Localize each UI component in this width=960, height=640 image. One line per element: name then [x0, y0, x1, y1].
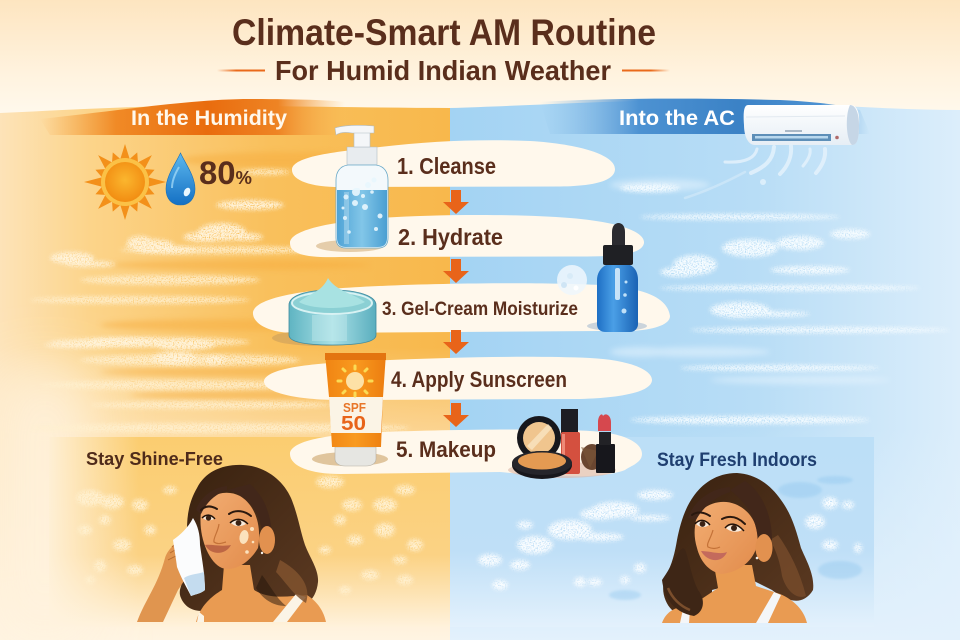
- panel: AC side background: [450, 100, 960, 640]
- icon: sunscreen tube: [312, 353, 388, 466]
- arrow 4: [443, 403, 469, 427]
- banner: into the AC: Into the AC: [619, 107, 735, 130]
- icon: sunscreen tube: 50: [341, 413, 366, 435]
- subtitle: For Humid Indian Weather: [275, 55, 611, 86]
- humidity value: 80%: [199, 155, 252, 191]
- step 3 pill: 3. Gel-Cream Moisturize: [382, 298, 578, 320]
- icon: gel cream jar: [272, 278, 376, 346]
- clouds: humidity side: [44, 200, 284, 364]
- step 2 pill: 2. Hydrate: [398, 224, 503, 250]
- icon: serum dropper bottle: [557, 223, 647, 332]
- woman dabbing face with tissue: [137, 465, 326, 622]
- step 4 pill: [264, 357, 652, 400]
- banner: in the humidity: In the Humidity: [131, 107, 287, 130]
- sky background: [0, 0, 960, 125]
- woman smiling indoors: [662, 473, 813, 623]
- step 3 pill: [253, 283, 670, 333]
- banner: in the humidity: [40, 99, 345, 135]
- panel: stay shine-free scene: [49, 437, 450, 627]
- step 2 pill: [290, 215, 644, 257]
- step 5 pill: 5. Makeup: [396, 437, 496, 462]
- step 5 pill: [290, 430, 642, 476]
- heading: stay fresh indoors: Stay Fresh Indoors: [657, 450, 817, 471]
- panel: humidity side background: [0, 106, 450, 640]
- icon: pump bottle: [316, 125, 388, 252]
- arrow 1: [443, 190, 469, 214]
- icon: makeup set: [508, 409, 616, 479]
- banner: into the AC: [540, 99, 870, 134]
- arrow 3: [443, 330, 469, 354]
- icon: sunscreen tube: SPF: [343, 401, 366, 415]
- icon: water drop: [166, 153, 195, 205]
- icon: sun: [84, 144, 166, 220]
- panel: stay fresh indoors scene: [450, 437, 874, 627]
- step 4 pill: 4. Apply Sunscreen: [391, 367, 567, 392]
- title: Climate-Smart AM Routine: [232, 12, 656, 53]
- step 1 pill: 1. Cleanse: [397, 153, 496, 179]
- icon: AC unit: [685, 105, 859, 198]
- heading: stay shine-free: Stay Shine-Free: [86, 448, 223, 469]
- step 1 pill: [292, 140, 615, 187]
- arrow 2: [443, 259, 469, 283]
